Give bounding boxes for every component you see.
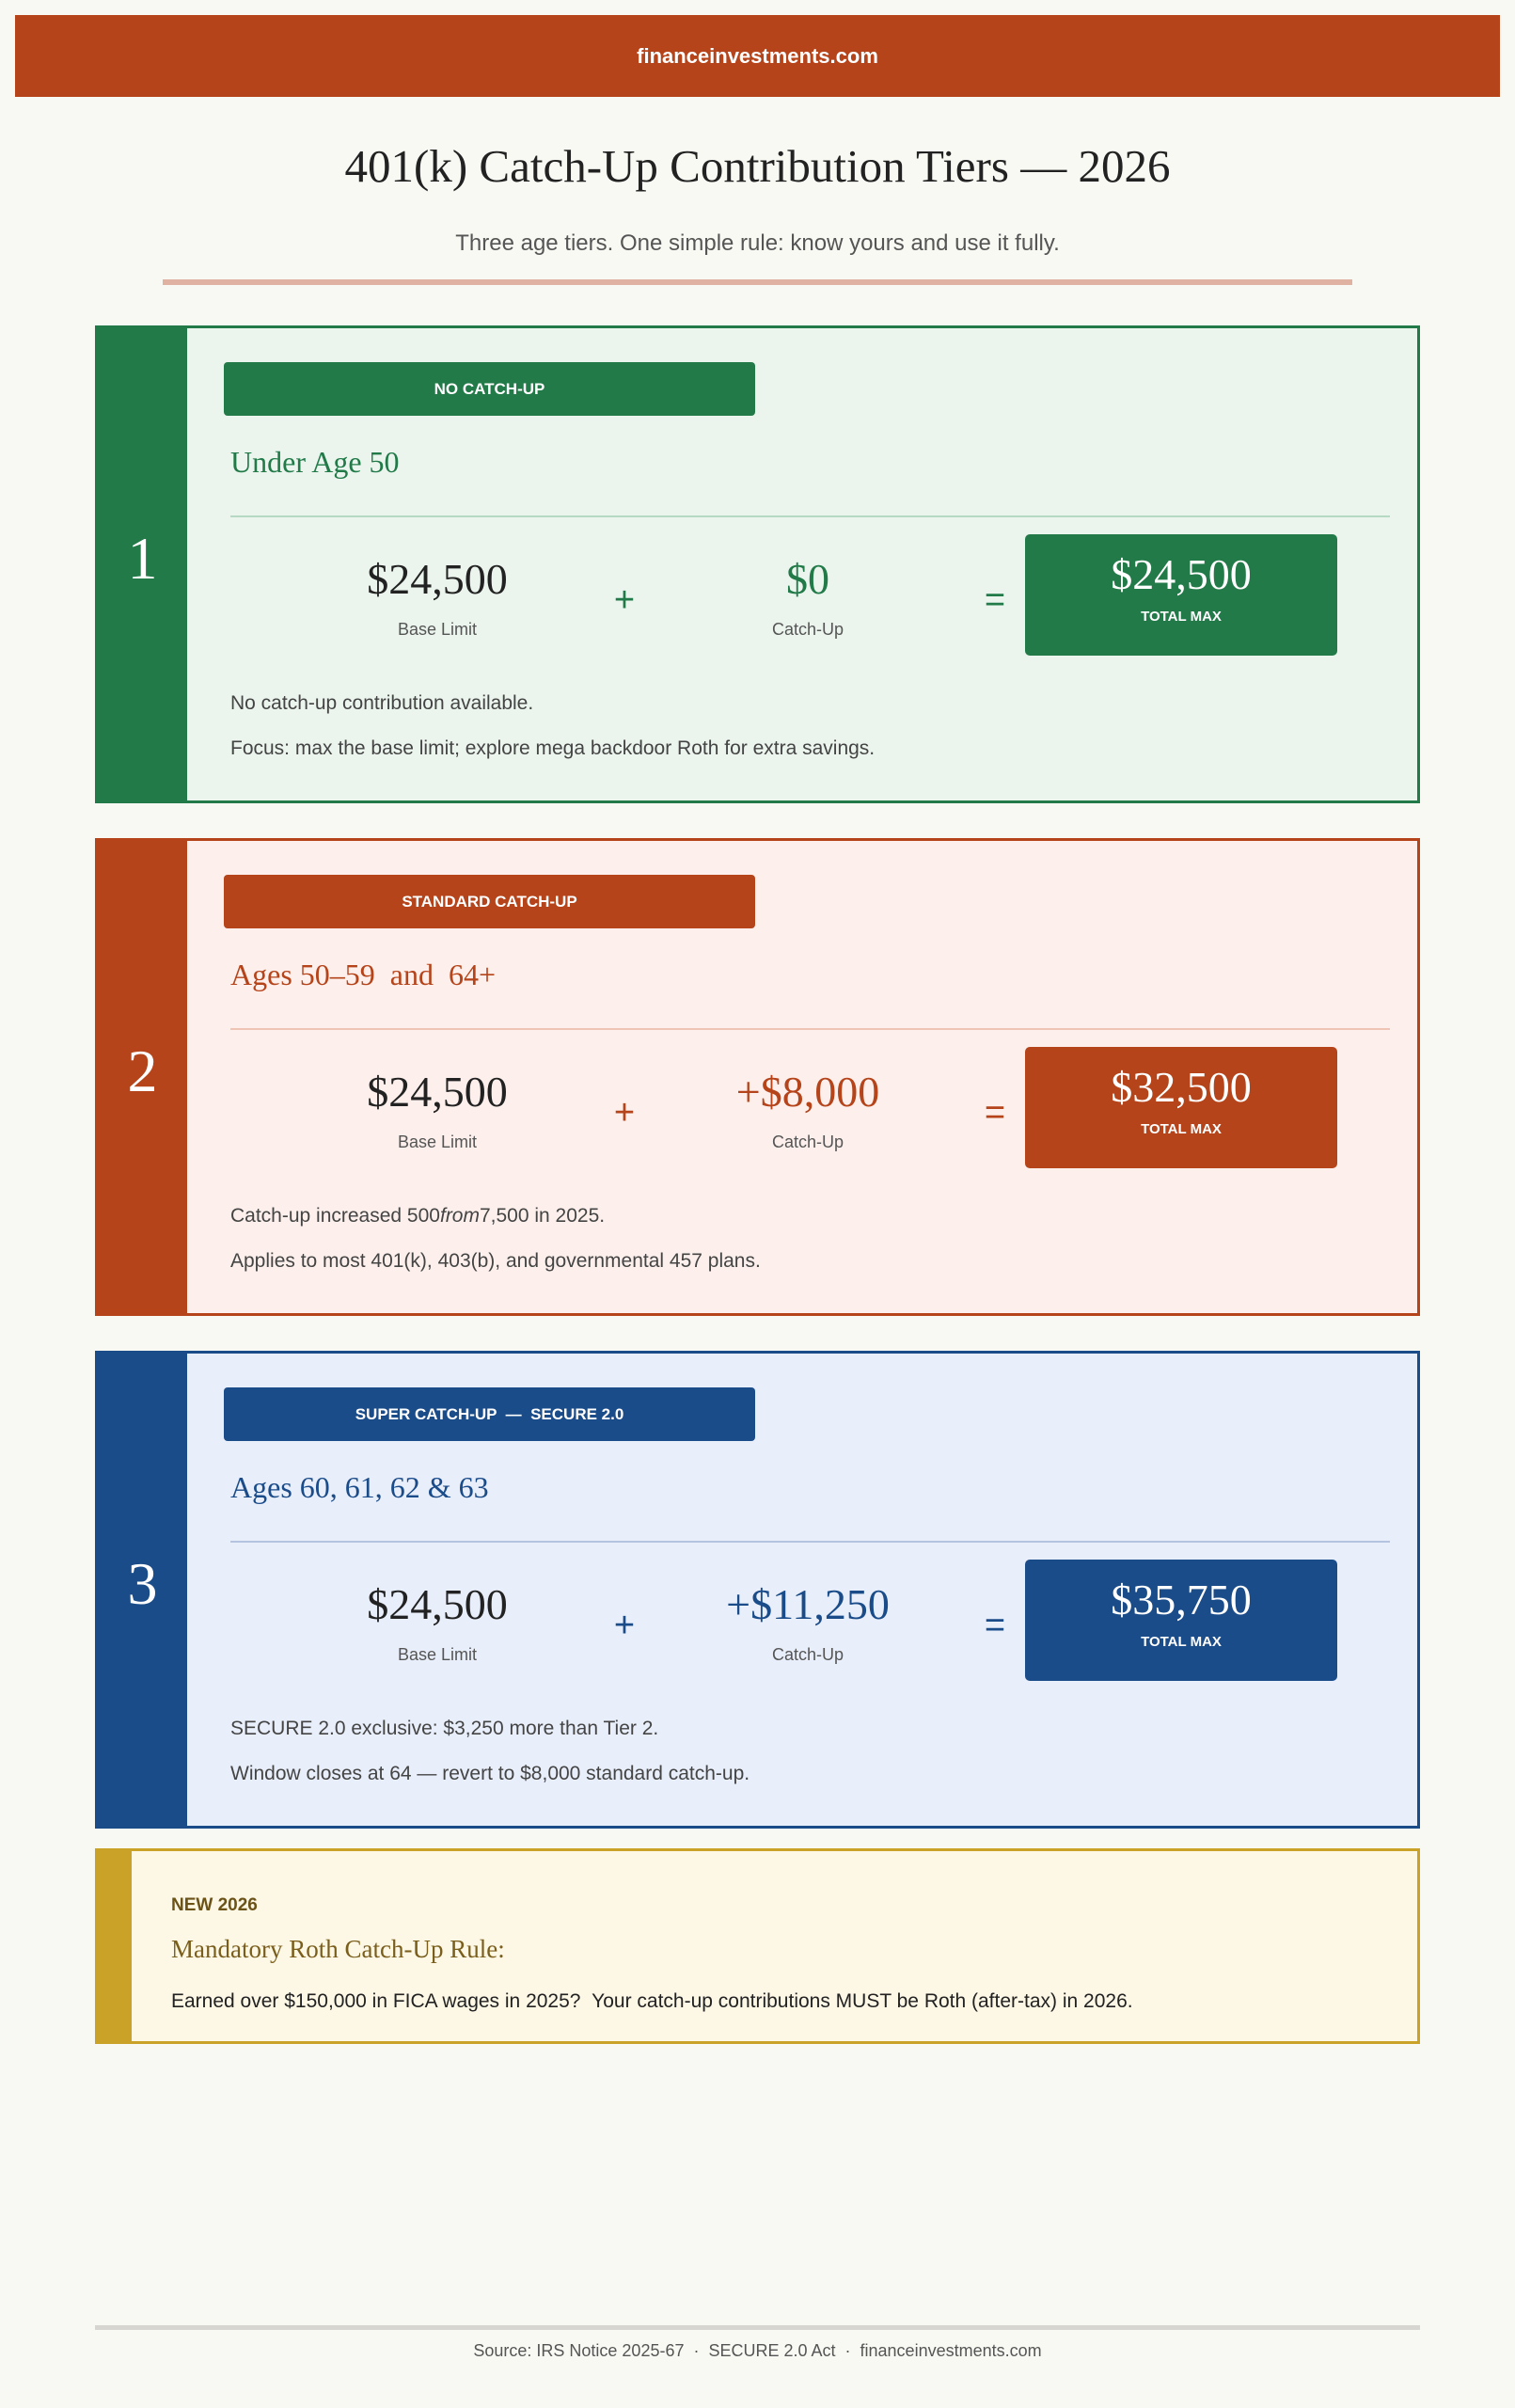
total box	[1025, 534, 1337, 656]
total box: $24,500	[1111, 550, 1252, 598]
catch-up amount: $0	[786, 555, 829, 603]
header bar: financeinvestments.com	[637, 43, 878, 68]
panel: tier 2: Base Limit	[398, 1133, 477, 1151]
tier number 2: 2	[128, 1038, 158, 1104]
total box	[1025, 1560, 1337, 1681]
total box	[1025, 1047, 1337, 1168]
panel: tier 1: Catch-Up	[772, 620, 844, 639]
callout: mandatory Roth rule	[95, 1848, 1420, 2044]
plus: +	[614, 1606, 635, 1645]
panel: tier 1	[95, 325, 1420, 803]
panel: tier 2: Catch-Up	[772, 1133, 844, 1151]
total box: $32,500	[1111, 1063, 1252, 1111]
panel: tier 3: Catch-Up	[772, 1645, 844, 1664]
badge: no catch-up: NO CATCH-UP	[434, 380, 544, 397]
title: 401(k) Catch-Up Contribution Tiers — 2026	[345, 140, 1170, 192]
badge: no catch-up	[224, 362, 755, 416]
catch-up amount: +$8,000	[736, 1068, 879, 1116]
base amount: $24,500	[367, 555, 508, 603]
badge: standard catch-up	[224, 875, 755, 928]
callout text: Earned over $150,000 in FICA wages in 2025? Your catch-up contributions MUST be Roth (after-tax) in 2026.	[171, 1990, 1133, 2012]
panel: tier 3	[95, 1351, 1420, 1829]
equals: =	[985, 580, 1005, 620]
notes: Catch-up increased 500from7,500 in 2025.	[230, 1205, 605, 1227]
panel: tier 1: Focus: max the base limit; explore mega backdoor Roth for extra savings.	[230, 737, 875, 759]
tier number 1	[98, 328, 187, 800]
footer source: Source: IRS Notice 2025-67 · SECURE 2.0 Act · financeinvestments.com	[473, 2341, 1042, 2360]
equals: =	[985, 1093, 1005, 1133]
heading: Under Age 50	[230, 445, 400, 479]
label new 2026: NEW 2026	[171, 1895, 258, 1915]
heading: Ages 60, 61, 62 & 63	[230, 1470, 489, 1504]
badge: standard catch-up: STANDARD CATCH-UP	[402, 892, 577, 911]
total box: $35,750	[1111, 1576, 1252, 1624]
plus: +	[614, 580, 635, 620]
base amount: $24,500	[367, 1580, 508, 1628]
total box: TOTAL MAX	[1141, 1121, 1222, 1137]
heading: Ages 50–59 and 64+	[230, 958, 496, 991]
subtitle: Three age tiers. One simple rule: know yours and use it fully.	[455, 230, 1060, 256]
panel: tier 2	[95, 838, 1420, 1316]
catch-up amount: +$11,250	[726, 1580, 890, 1628]
tier number 2	[98, 841, 187, 1313]
tier number 1: 1	[128, 525, 158, 592]
base amount: $24,500	[367, 1068, 508, 1116]
panel: tier 2: Applies to most 401(k), 403(b), and governmental 457 plans.	[230, 1250, 761, 1272]
total box: TOTAL MAX	[1141, 609, 1222, 625]
tier number 3	[98, 1354, 187, 1826]
callout heading: Mandatory Roth Catch-Up Rule:	[171, 1935, 505, 1963]
tier number 3: 3	[128, 1550, 158, 1617]
panel: tier 3: Base Limit	[398, 1645, 477, 1664]
badge: super catch-up	[224, 1387, 755, 1441]
panel: tier 1: Base Limit	[398, 620, 477, 639]
notes: SECURE 2.0 exclusive: $3,250 more than Tier 2.	[230, 1718, 658, 1739]
header bar	[15, 15, 1500, 97]
notes: No catch-up contribution available.	[230, 692, 533, 714]
plus: +	[614, 1093, 635, 1133]
total box: TOTAL MAX	[1141, 1634, 1222, 1650]
panel: tier 3: Window closes at 64 — revert to $8,000 standard catch-up.	[230, 1763, 750, 1784]
badge: super catch-up: SUPER CATCH-UP — SECURE 2.0	[355, 1405, 623, 1422]
equals: =	[985, 1606, 1005, 1645]
